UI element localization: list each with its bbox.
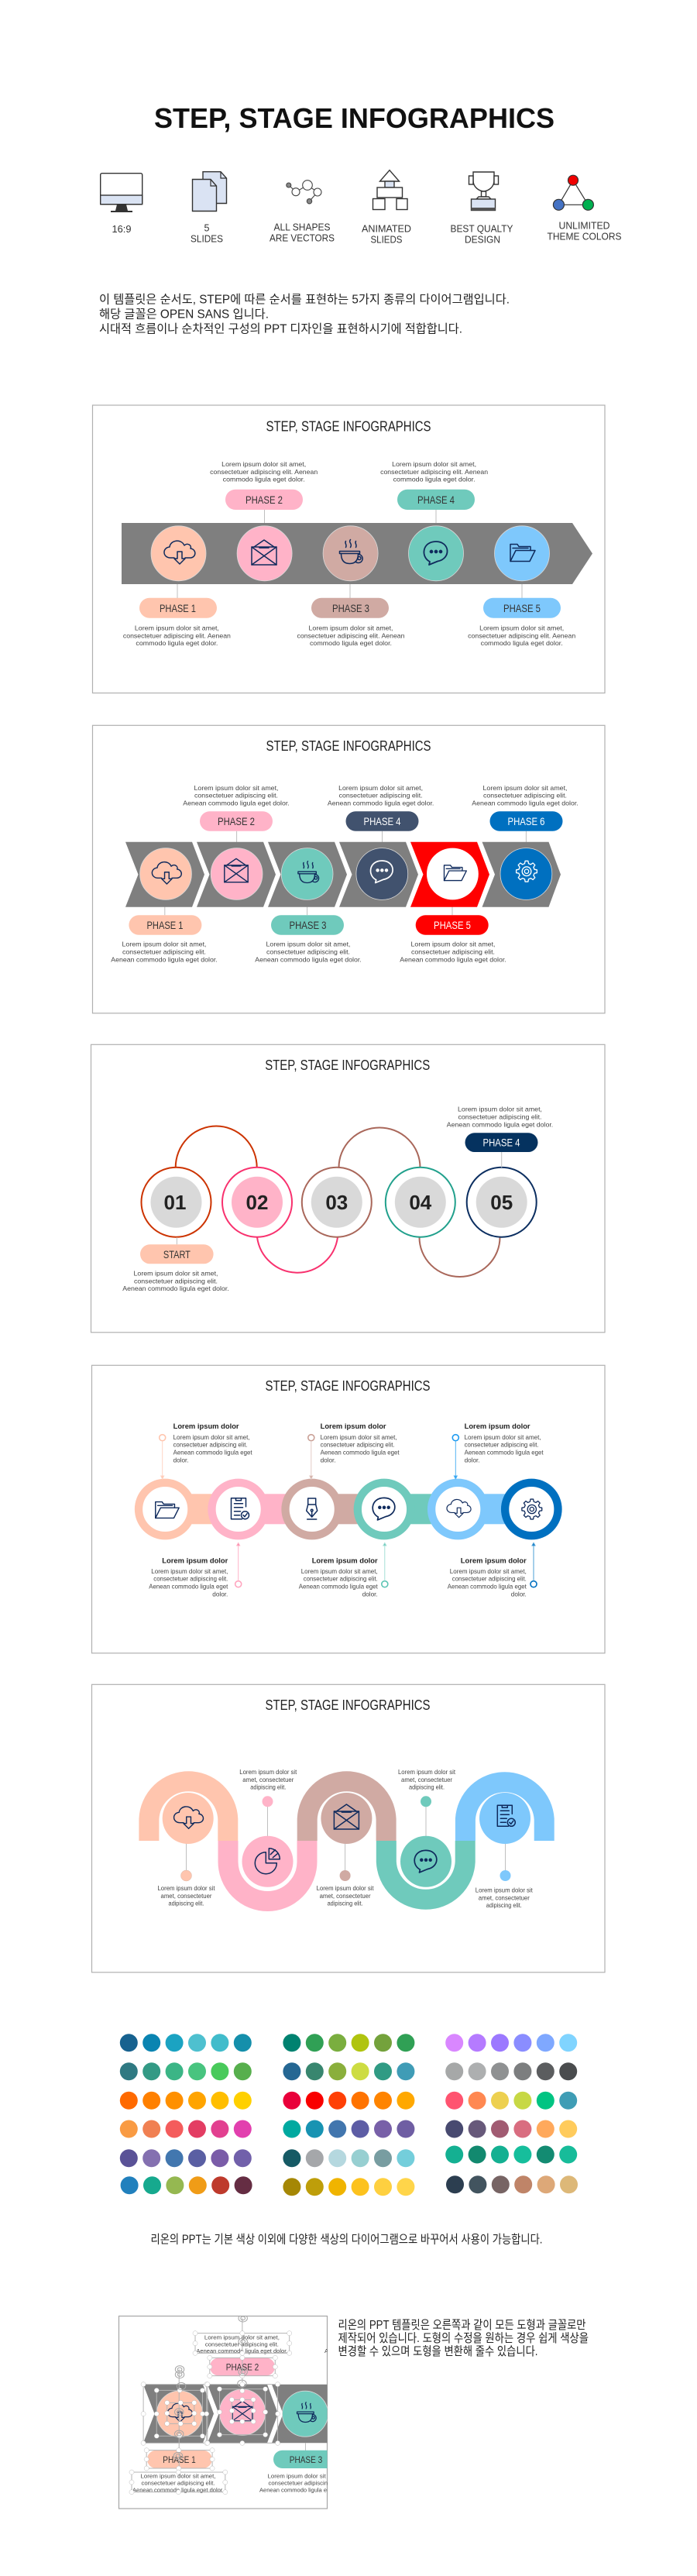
text block top 2: consectetuer adipiscing elit. — [321, 1441, 395, 1449]
text block top 3 — [465, 1422, 544, 1464]
label: all shapes are vectors — [270, 222, 335, 243]
text 5: adipiscing elit. — [486, 1901, 522, 1909]
main title: STEP, STAGE INFOGRAPHICS — [154, 102, 555, 134]
label: 5 slides — [191, 223, 223, 245]
panel title: STEP, STAGE INFOGRAPHICS — [265, 1378, 431, 1394]
text: phase 5: Lorem ipsum dolor sit amet, — [479, 624, 564, 632]
circles with icons — [151, 526, 550, 581]
text block bottom 3: consectetuer adipiscing elit. — [452, 1575, 527, 1583]
text 1 — [158, 1884, 215, 1907]
text: phase 1 — [123, 624, 231, 647]
phase 2 pill — [200, 811, 273, 831]
phase 6 pill: PHASE 6 — [508, 815, 545, 827]
text block bottom 1: consectetuer adipiscing elit. — [153, 1575, 228, 1583]
icon circle: cup — [281, 848, 333, 899]
label: animated slieds: SLIEDS — [370, 234, 403, 245]
preview text top: Lorem ipsum dolor sit amet, — [204, 2334, 280, 2341]
text: phase 3: commodo ligula eget dolor. — [310, 639, 392, 647]
connector lines — [177, 510, 522, 598]
preview text bottom: Aenean commodo ligula eget dolor. — [259, 2487, 351, 2493]
step 02: 02 — [246, 1191, 268, 1214]
text: phase 6: Lorem ipsum dolor sit amet, — [483, 784, 567, 792]
text block top 2: dolor. — [321, 1457, 336, 1464]
text: phase 1: commodo ligula eget dolor. — [136, 639, 218, 647]
editing note text: 변경할 수 있으며 도형을 변환해 줄수 있습니다. — [338, 2344, 537, 2358]
text: phase 4: commodo ligula eget dolor. — [393, 476, 476, 483]
text: phase 4: consectetuer adipiscing elit. Aenean — [380, 468, 488, 476]
serpentine ribbon — [149, 1781, 544, 1901]
text: start: Lorem ipsum dolor sit amet, — [133, 1270, 218, 1278]
panel: chevron timeline — [93, 725, 605, 1013]
text 5: amet, consectetuer — [479, 1893, 530, 1901]
step 05 — [467, 1168, 537, 1237]
phase 5 pill: PHASE 5 — [503, 602, 541, 614]
step 01 — [141, 1168, 211, 1237]
text: phase 2 — [210, 460, 318, 483]
icon circle: envelope — [211, 848, 263, 899]
text block top 3: Lorem ipsum dolor sit amet, — [465, 1433, 541, 1441]
label: 5 slides: SLIDES — [191, 234, 223, 245]
connector bars — [165, 1494, 531, 1524]
text 3: Lorem ipsum dolor sit — [317, 1884, 374, 1892]
icon: blocks — [373, 170, 407, 209]
color swatches group 3 — [445, 2034, 578, 2193]
preview text top: Aenean commodo ligula eget dolor. — [196, 2347, 287, 2354]
feature icon row — [101, 170, 621, 245]
text block bottom 2 — [299, 1557, 378, 1598]
intro text: 해당 글꼴은 OPEN SANS 입니다. — [99, 307, 269, 321]
text block top 2: Lorem ipsum dolor — [321, 1422, 386, 1431]
circle: clipboard — [479, 1793, 530, 1844]
text block bottom 3 — [448, 1557, 527, 1598]
selection handles — [129, 2315, 292, 2495]
text: phase 1: consectetuer adipiscing elit. Aenean — [123, 631, 231, 639]
step 02 — [222, 1168, 292, 1237]
phase 3 pill — [271, 915, 344, 935]
icon: theme color triangle — [553, 175, 593, 210]
phase 1 pill — [139, 598, 217, 618]
preview text top: consectetuer adipiscing elit. — [205, 2341, 279, 2347]
label: best quality design: DESIGN — [465, 234, 500, 245]
text block top 3: Aenean commodo ligula eget — [465, 1448, 544, 1456]
text block top 1: dolor. — [173, 1457, 189, 1464]
text: phase 4 — [447, 1106, 553, 1128]
icon circle: envelope — [237, 526, 292, 581]
text block top 2 — [321, 1422, 400, 1464]
label: all shapes are vectors: ARE VECTORS — [270, 232, 335, 243]
text block bottom 3: Lorem ipsum dolor sit amet, — [450, 1567, 527, 1575]
circle: chat — [400, 1836, 452, 1887]
ring: clipboard — [212, 1483, 265, 1536]
text: phase 2: Aenean commodo ligula eget dolor. — [183, 800, 290, 807]
text 1: adipiscing elit. — [169, 1900, 204, 1907]
text 5: Lorem ipsum dolor sit — [476, 1886, 533, 1893]
phase 5 pill — [416, 915, 489, 935]
icon circle: gear — [500, 848, 552, 899]
text 2: Lorem ipsum dolor sit — [239, 1768, 297, 1776]
phase 6 pill — [489, 811, 562, 831]
icon: slides — [192, 172, 226, 211]
phase 4 pill: PHASE 4 — [483, 1137, 520, 1149]
intro text: 이 템플릿은 순서도, STEP에 따른 순서를 표현하는 5가지 종류의 다이어그램입니다. — [99, 293, 510, 307]
text: phase 4: Aenean commodo ligula eget dolor. — [328, 800, 434, 807]
label: best quality design: BEST QUALTY — [451, 223, 513, 234]
text block bottom 3: dolor. — [511, 1591, 527, 1598]
icon circle: cup — [323, 526, 378, 581]
clipped slide preview — [129, 2316, 327, 2495]
phase 1 pill: PHASE 1 — [147, 919, 184, 931]
text block bottom 1 — [149, 1557, 228, 1598]
text: phase 3: Lorem ipsum dolor sit amet, — [308, 624, 393, 632]
chevrons — [125, 842, 561, 907]
text 1: Lorem ipsum dolor sit — [158, 1884, 215, 1892]
text: phase 3: consectetuer adipiscing elit. Aenean — [297, 631, 405, 639]
text block top 3: consectetuer adipiscing elit. — [465, 1441, 539, 1449]
circle: pie chart — [242, 1836, 293, 1887]
ring: folder — [139, 1483, 191, 1536]
text 4: adipiscing elit. — [409, 1783, 445, 1791]
icon circle: cloud — [140, 848, 191, 899]
step 01: 01 — [164, 1191, 186, 1214]
icon circle: folder — [427, 848, 479, 899]
text: phase 2: consectetuer adipiscing elit. Aenean — [210, 468, 318, 476]
text: phase 5: Aenean commodo ligula eget dolor. — [400, 955, 506, 963]
text: phase 5 — [400, 941, 506, 963]
text: phase 4 — [380, 460, 488, 483]
preview text top: Aenean commodo ligula eget dolor. — [324, 2347, 416, 2354]
text: start — [122, 1270, 229, 1292]
color swatches group 2 — [283, 2034, 414, 2196]
preview text bottom: consectetuer adipiscing elit. — [268, 2479, 342, 2487]
phase 4 pill: PHASE 4 — [364, 815, 401, 827]
text: phase 3: Lorem ipsum dolor sit amet, — [266, 941, 350, 948]
text: phase 1 — [111, 941, 218, 963]
text: phase 2: consectetuer adipiscing elit. — [194, 792, 278, 800]
text: phase 4: consectetuer adipiscing elit. — [339, 792, 423, 800]
text block bottom 2: consectetuer adipiscing elit. — [304, 1575, 378, 1583]
arrow: top 1 — [160, 1435, 166, 1479]
preview text bottom: consectetuer adipiscing elit. — [141, 2479, 215, 2487]
text: phase 1: Lorem ipsum dolor sit amet, — [122, 941, 206, 948]
label: unlimited theme colors — [547, 220, 621, 242]
ring: chat — [358, 1483, 410, 1536]
label: 5 slides: 5 — [204, 223, 210, 234]
text: phase 2: Lorem ipsum dolor sit amet, — [194, 784, 279, 792]
text 4: amet, consectetuer — [401, 1776, 452, 1783]
text block top 1: consectetuer adipiscing elit. — [173, 1441, 248, 1449]
text block bottom 3: Aenean commodo ligula eget — [448, 1583, 527, 1591]
phase 4 pill — [465, 1133, 537, 1168]
phase 3 pill: PHASE 3 — [290, 919, 327, 931]
label: best quality design — [451, 223, 513, 245]
arrow: top 3 — [452, 1435, 458, 1479]
text block top 1: Aenean commodo ligula eget — [173, 1448, 252, 1456]
phase 4 pill — [345, 811, 418, 831]
text: phase 4: Lorem ipsum dolor sit amet, — [392, 460, 476, 468]
phase 4 pill — [397, 490, 475, 510]
text: phase 2 — [183, 784, 290, 807]
text 2 — [239, 1768, 297, 1791]
text: phase 5: commodo ligula eget dolor. — [481, 639, 563, 647]
phase 1 pill: PHASE 1 — [160, 602, 196, 614]
text 2: adipiscing elit. — [250, 1783, 286, 1791]
text block top 2: Aenean commodo ligula eget — [321, 1448, 400, 1456]
phase 5 pill: PHASE 5 — [434, 919, 471, 931]
icon circle: cloud — [151, 526, 206, 581]
text block bottom 1: Aenean commodo ligula eget — [149, 1583, 228, 1591]
color swatches group 1 — [120, 2034, 252, 2194]
text block top 3: dolor. — [465, 1457, 480, 1464]
preview pill phase 3: PHASE 3 — [290, 2454, 323, 2465]
preview text bottom — [133, 2474, 327, 2493]
text: phase 5: Lorem ipsum dolor sit amet, — [410, 941, 496, 948]
text: start: consectetuer adipiscing elit. — [134, 1277, 218, 1285]
panel: arrow timeline — [93, 405, 605, 693]
text: phase 4 — [328, 784, 434, 807]
preview circles — [156, 2389, 328, 2437]
label: all shapes are vectors: ALL SHAPES — [274, 222, 330, 232]
text: phase 4: consectetuer adipiscing elit. — [458, 1113, 542, 1120]
phase 3 pill: PHASE 3 — [332, 602, 369, 614]
phase 1 pill — [129, 915, 201, 935]
text block bottom 1: Lorem ipsum dolor sit amet, — [151, 1567, 228, 1575]
editing note text: 제작되어 있습니다. 도형의 수정을 원하는 경우 쉽게 색상을 — [338, 2331, 589, 2345]
step 04 — [386, 1168, 455, 1237]
text: phase 3 — [297, 624, 405, 647]
text 4: Lorem ipsum dolor sit — [398, 1768, 456, 1776]
ring: cloud — [431, 1483, 485, 1536]
leader lines and dots — [181, 1796, 511, 1881]
arrow: bottom 1 — [235, 1543, 242, 1587]
phase 2 pill: PHASE 2 — [245, 494, 283, 506]
start pill: START — [163, 1248, 191, 1260]
preview icons — [167, 2401, 316, 2422]
arrow bar — [122, 523, 592, 584]
text block bottom 2: dolor. — [362, 1591, 378, 1598]
phase 3 pill — [311, 598, 389, 618]
connector lines — [165, 831, 526, 915]
text: start: Aenean commodo ligula eget dolor. — [122, 1285, 229, 1292]
icon circle: folder — [494, 526, 550, 581]
text: phase 2: Lorem ipsum dolor sit amet, — [221, 460, 306, 468]
text: phase 3 — [255, 941, 362, 963]
step 04: 04 — [409, 1191, 432, 1214]
preview pill phase 1: PHASE 1 — [163, 2454, 196, 2465]
panel: serpentine path — [91, 1684, 605, 1972]
text block bottom 3: Lorem ipsum dolor — [461, 1557, 527, 1565]
text block bottom 2: Aenean commodo ligula eget — [299, 1583, 378, 1591]
step 05: 05 — [490, 1191, 513, 1214]
phase 5 pill — [483, 598, 561, 618]
label: 16:9: 16:9 — [112, 224, 132, 235]
text block bottom 2: Lorem ipsum dolor sit amet, — [301, 1567, 378, 1575]
text: phase 6: consectetuer adipiscing elit. — [483, 792, 567, 800]
editing note text: 리온의 PPT 템플릿은 오른쪽과 같이 모든 도형과 글꼴로만 — [338, 2318, 585, 2332]
preview pill phase 2: PHASE 2 — [226, 2361, 259, 2372]
label: animated slieds — [362, 223, 411, 245]
step 03: 03 — [325, 1191, 348, 1214]
arrow: top 2 — [308, 1435, 314, 1479]
text: phase 3: consectetuer adipiscing elit. — [266, 948, 350, 956]
text 3: amet, consectetuer — [320, 1892, 371, 1900]
connecting arcs — [176, 1126, 500, 1277]
text block top 2: Lorem ipsum dolor sit amet, — [321, 1433, 397, 1441]
arrow: bottom 2 — [382, 1543, 388, 1587]
text: phase 5 — [468, 624, 575, 647]
preview text bottom: Aenean commodo ligula eget dolor. — [132, 2487, 224, 2493]
intro text — [99, 293, 510, 336]
icon circle: chat — [409, 526, 463, 581]
icon: trophy — [469, 172, 499, 211]
panel: numbered circles — [91, 1044, 605, 1333]
panel title: STEP, STAGE INFOGRAPHICS — [265, 1058, 430, 1073]
colors caption: 리온의 PPT는 기본 색상 이외에 다양한 색상의 다이어그램으로 바꾸어서 사용이 가능합니다. — [150, 2233, 542, 2247]
panel title: STEP, STAGE INFOGRAPHICS — [266, 418, 431, 434]
text: phase 6 — [472, 784, 579, 807]
text 3: adipiscing elit. — [328, 1900, 363, 1907]
text block bottom 2: Lorem ipsum dolor — [312, 1557, 378, 1565]
text 4 — [398, 1768, 456, 1791]
panel: linked rings — [91, 1365, 605, 1653]
text: phase 3: Aenean commodo ligula eget dolor. — [255, 955, 362, 963]
arrow: bottom 3 — [530, 1543, 537, 1587]
text 5 — [476, 1886, 533, 1909]
text 3 — [317, 1884, 374, 1907]
preview chevrons — [143, 2385, 342, 2443]
circles with icons — [140, 848, 552, 899]
text: phase 6: Aenean commodo ligula eget dolor. — [472, 800, 579, 807]
preview pill phase 3 — [273, 2444, 327, 2468]
phase 2 pill — [225, 490, 303, 510]
intro text: 시대적 흐름이나 순차적인 구성의 PPT 디자인을 표현하시기에 적합합니다. — [99, 322, 462, 336]
text: phase 1: Aenean commodo ligula eget dolor. — [111, 955, 218, 963]
preview text bottom: Lorem ipsum dolor sit amet, — [268, 2473, 342, 2479]
text: phase 4: Lorem ipsum dolor sit amet, — [458, 1106, 542, 1113]
preview pill phase 2 — [210, 2358, 275, 2376]
ring: gear — [505, 1483, 558, 1536]
text: phase 2: commodo ligula eget dolor. — [223, 476, 305, 483]
step 03 — [302, 1168, 372, 1237]
text block bottom 1: Lorem ipsum dolor — [162, 1557, 228, 1565]
icon: monitor 16:9 — [101, 174, 142, 212]
preview text top — [197, 2335, 327, 2354]
phase 2 pill: PHASE 2 — [218, 815, 255, 827]
icon circle: chat — [356, 848, 408, 899]
text: phase 1: Lorem ipsum dolor sit amet, — [135, 624, 219, 632]
panel title: STEP, STAGE INFOGRAPHICS — [266, 738, 431, 754]
text block top 3: Lorem ipsum dolor — [465, 1422, 530, 1431]
editable shapes screenshot — [118, 2315, 328, 2509]
text: phase 5: consectetuer adipiscing elit. — [411, 948, 495, 956]
preview text bottom: Lorem ipsum dolor sit amet, — [141, 2473, 215, 2479]
panel title: STEP, STAGE INFOGRAPHICS — [265, 1697, 431, 1713]
ring: pen nib — [285, 1483, 338, 1536]
text block top 1: Lorem ipsum dolor — [173, 1422, 239, 1431]
text: phase 4: Lorem ipsum dolor sit amet, — [338, 784, 423, 792]
label: unlimited theme colors: UNLIMITED — [559, 220, 610, 231]
text: phase 5: consectetuer adipiscing elit. Aenean — [468, 631, 575, 639]
start pill — [140, 1237, 214, 1264]
text 1: amet, consectetuer — [161, 1892, 212, 1900]
editing note text — [338, 2318, 589, 2358]
text block top 1: Lorem ipsum dolor sit amet, — [173, 1433, 250, 1441]
label: unlimited theme colors: THEME COLORS — [547, 231, 621, 242]
text block top 1 — [173, 1422, 252, 1464]
icon: vectors — [287, 181, 321, 204]
label: animated slieds: ANIMATED — [362, 223, 411, 234]
circle: cloud — [163, 1793, 214, 1844]
circle: envelope — [321, 1793, 372, 1844]
phase 4 pill: PHASE 4 — [417, 494, 455, 506]
text: phase 1: consectetuer adipiscing elit. — [122, 948, 206, 956]
text: phase 4: Aenean commodo ligula eget dolor. — [447, 1120, 553, 1128]
text 2: amet, consectetuer — [242, 1776, 294, 1783]
text block bottom 1: dolor. — [212, 1591, 228, 1598]
preview pill phase 1 — [147, 2450, 212, 2468]
pointer arrows — [160, 1435, 537, 1587]
